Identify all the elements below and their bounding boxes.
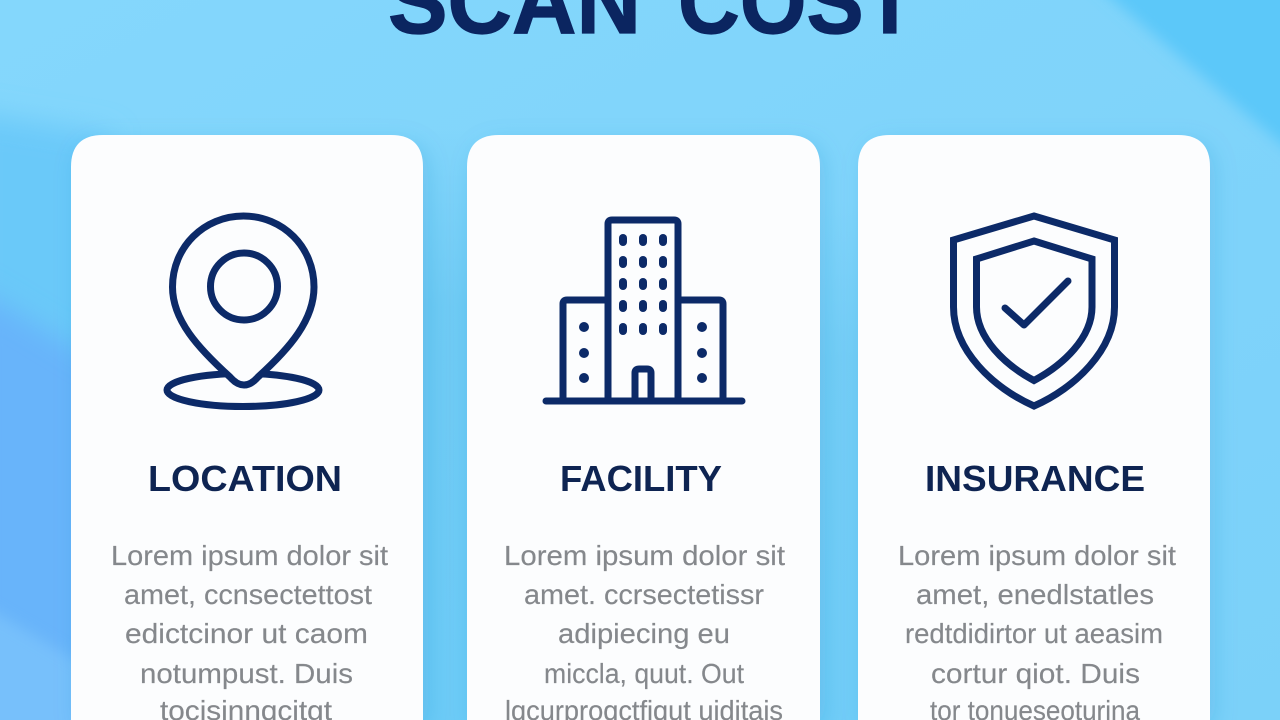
text block: insurance: cortur qiot. Duis (931, 658, 1140, 689)
icon: shield with check (954, 216, 1114, 406)
text block: insurance: amet, enedlstatles (916, 579, 1154, 610)
icon: location pin (167, 216, 319, 406)
text block: insurance: redtdidirtor ut aeasim (905, 618, 1163, 649)
text block: insurance: Lorem ipsum dolor sit (898, 540, 1176, 571)
text block: location: edictcinor ut caom (125, 618, 368, 649)
text block: facility (504, 540, 785, 720)
text block: facility: adipiecing eu (558, 618, 730, 649)
heading: insurance: INSURANCE (925, 458, 1145, 499)
panel: location (71, 135, 423, 720)
text block: location: amet, ccnsectettost (124, 579, 372, 610)
icon: building (546, 220, 742, 401)
text block: insurance (898, 540, 1176, 720)
panel: insurance (858, 135, 1210, 720)
text block: facility: Lorem ipsum dolor sit (504, 540, 785, 571)
text block: location: notumpust. Duis (140, 658, 353, 689)
text block: facility: miccla, quut. Out (544, 658, 744, 689)
heading: location: LOCATION (148, 458, 342, 499)
heading: facility: FACILITY (560, 458, 722, 499)
text block: location: Lorem ipsum dolor sit (111, 540, 388, 571)
text block: location (111, 540, 388, 720)
title (388, 0, 916, 53)
panel: facility (467, 135, 820, 720)
text block: facility: amet. ccrsectetissr (524, 579, 764, 610)
